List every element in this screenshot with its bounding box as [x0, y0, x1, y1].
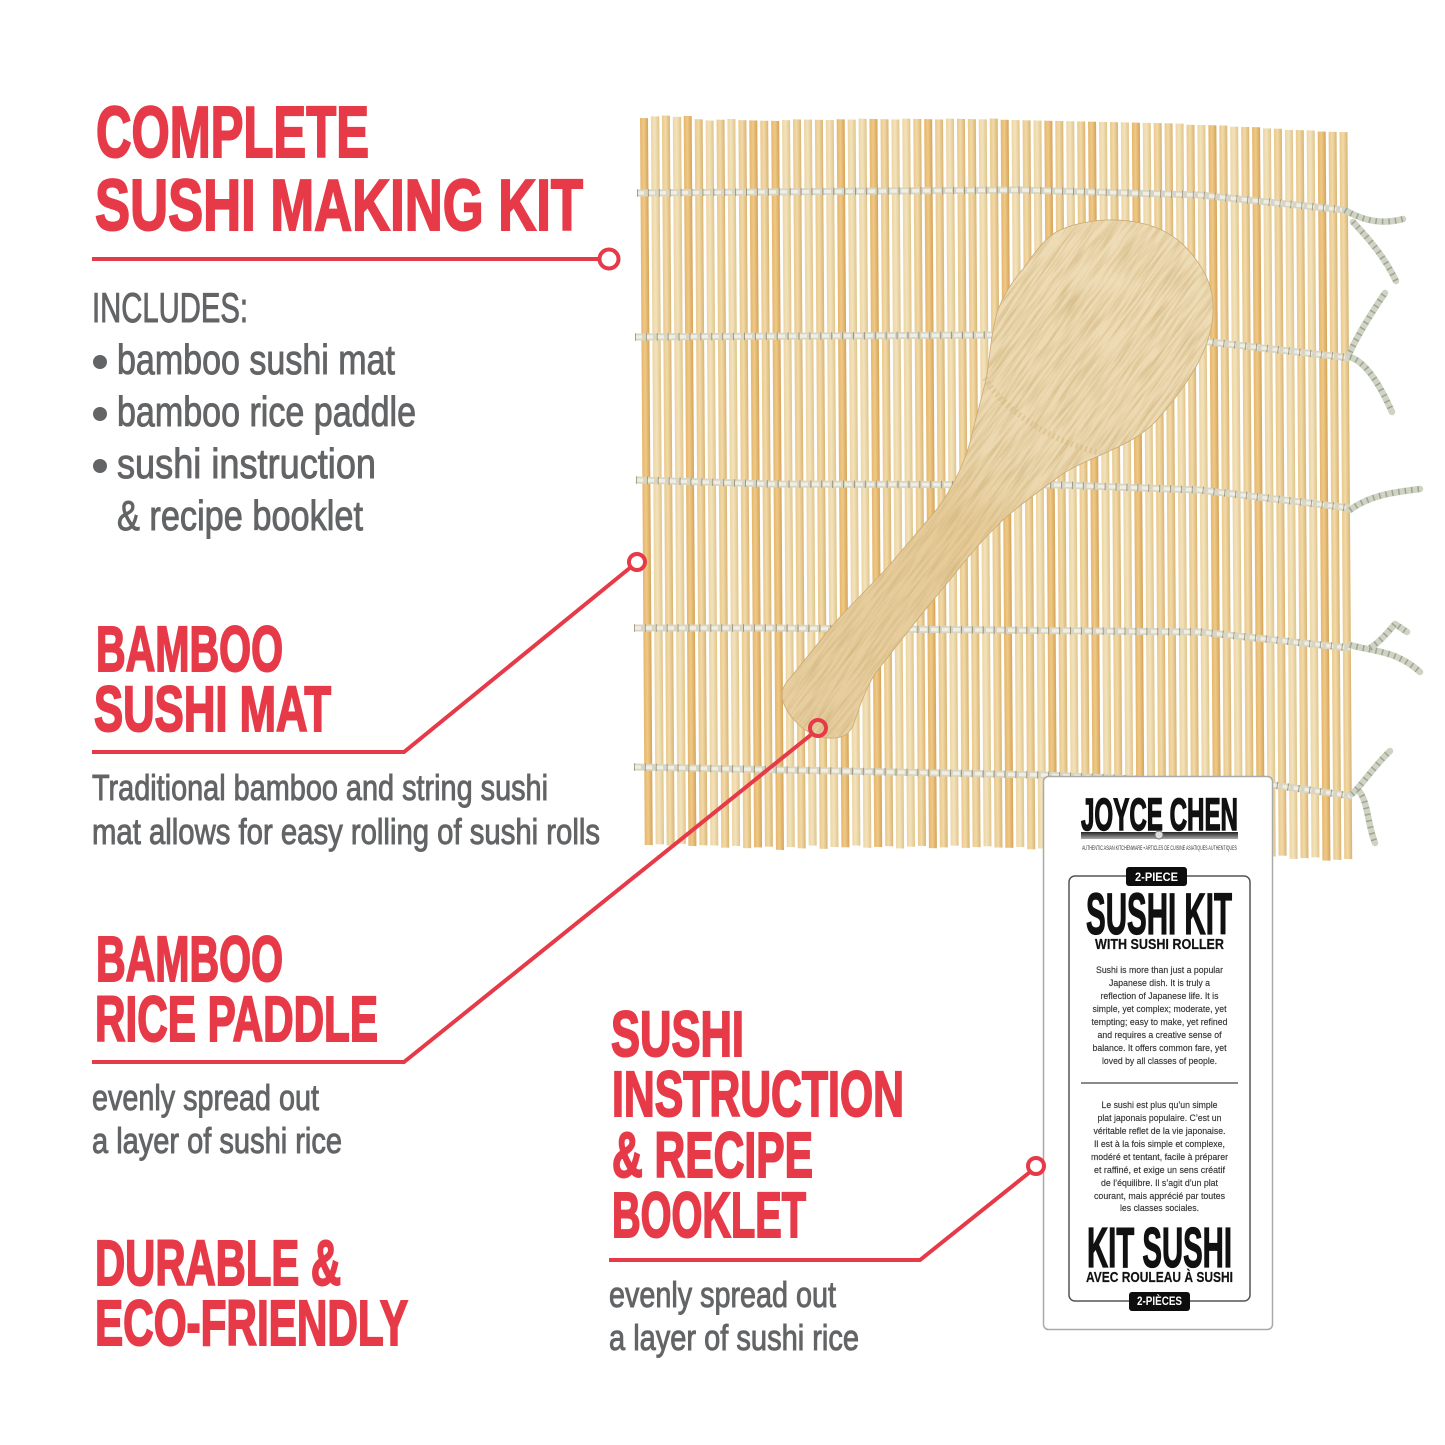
bamboo rice paddle photo	[782, 220, 1214, 739]
booklet title: french: KIT SUSHI	[1087, 1216, 1232, 1280]
booklet title: english: WITH SUSHI ROLLER	[1095, 937, 1224, 953]
booklet paragraph: english: loved by all classes of people.	[1102, 1056, 1217, 1067]
heading: sushi instruction and recipe booklet: SUSHI	[611, 998, 744, 1070]
heading: durable and eco-friendly: DURABLE &	[95, 1227, 341, 1299]
brand logo: JOYCE CHEN	[1081, 789, 1238, 840]
heading: bamboo sushi mat: BAMBOO	[96, 613, 283, 685]
bamboo sushi mat photo	[634, 111, 1420, 862]
heading: bamboo rice paddle	[95, 923, 378, 1055]
booklet paragraph: english: simple, yet complex; moderate, yet	[1092, 1004, 1227, 1015]
booklet title: french: AVEC ROULEAU À SUSHI	[1086, 1269, 1233, 1286]
leader dot: booklet	[1028, 1158, 1044, 1174]
includes list: & recipe booklet	[117, 492, 363, 539]
text: sushi mat description	[92, 767, 600, 852]
binding strings	[634, 190, 1352, 796]
booklet paragraph: french	[1091, 1100, 1228, 1214]
heading: sushi instruction and recipe booklet: & RECIPE	[612, 1119, 813, 1191]
booklet paragraph: english: Japanese dish. It is truly a	[1109, 978, 1211, 989]
text: booklet description	[609, 1274, 859, 1358]
booklet paragraph: english: and requires a creative sense of	[1098, 1030, 1222, 1041]
booklet paragraph: english: balance. It offers common fare, yet	[1092, 1043, 1227, 1054]
brand logo: AUTHENTIC ASIAN KITCHENWARE • ARTICLES DE CUISINE ASIATIQUES AUTHENTIQUES	[1082, 846, 1237, 852]
heading: sushi instruction and recipe booklet: BOOKLET	[612, 1179, 806, 1251]
booklet paragraph: french: les classes sociales.	[1120, 1203, 1199, 1214]
booklet paragraph: french: et raffiné, et exige un sens créatif	[1094, 1165, 1225, 1176]
includes list: bamboo rice paddle	[117, 388, 416, 435]
loose rope ends	[1345, 210, 1420, 843]
text: rice paddle description	[92, 1077, 342, 1161]
booklet paragraph: french: plat japonais populaire. C’est un	[1098, 1113, 1222, 1124]
booklet paragraph: english	[1092, 965, 1228, 1067]
leader line: kit heading	[92, 250, 618, 268]
leader line: rice paddle	[92, 720, 826, 1062]
heading: bamboo sushi mat: SUSHI MAT	[94, 673, 331, 745]
includes list: sushi instruction	[117, 440, 376, 487]
text: rice paddle description: evenly spread out	[92, 1077, 319, 1118]
booklet paragraph: french: de l’équilibre. Il s’agit d’un plat	[1101, 1178, 1218, 1189]
leader line: booklet	[609, 1172, 1030, 1260]
heading: sushi instruction and recipe booklet: INSTRUCTION	[612, 1058, 904, 1130]
booklet title: french	[1086, 1216, 1233, 1286]
heading: durable and eco-friendly: ECO-FRIENDLY	[95, 1287, 408, 1359]
text: rice paddle description: a layer of sushi rice	[92, 1120, 342, 1161]
booklet title: english: SUSHI KIT	[1086, 882, 1232, 947]
includes list: INCLUDES:	[92, 284, 248, 331]
bamboo rods	[640, 111, 1352, 862]
booklet paragraph: french: modéré et tentant, facile à préparer	[1091, 1152, 1228, 1163]
text: sushi mat description: Traditional bamboo and string sushi	[92, 767, 548, 808]
heading: complete sushi making kit: SUSHI MAKING KIT	[95, 166, 583, 246]
heading: bamboo sushi mat	[94, 613, 331, 745]
brand logo	[1081, 789, 1238, 852]
heading: complete sushi making kit: COMPLETE	[96, 93, 369, 173]
badge: 2-pieces: 2-PIÈCES	[1137, 1295, 1182, 1308]
booklet inner frame	[1069, 876, 1250, 1301]
text: sushi mat description: mat allows for easy rolling of sushi rolls	[92, 811, 600, 852]
booklet paragraph: english: reflection of Japanese life. It is	[1100, 991, 1219, 1002]
heading: sushi instruction and recipe booklet	[611, 998, 904, 1251]
includes list	[92, 284, 416, 539]
booklet title: english	[1086, 882, 1232, 953]
booklet paragraph: english: tempting; easy to make, yet refined	[1092, 1017, 1228, 1028]
badge: 2-piece	[1126, 867, 1187, 886]
badge: 2-pieces	[1129, 1292, 1190, 1311]
heading: complete sushi making kit	[95, 93, 583, 246]
text: booklet description: evenly spread out	[609, 1274, 836, 1315]
heading: bamboo rice paddle: RICE PADDLE	[95, 983, 378, 1055]
heading: durable and eco-friendly	[95, 1227, 408, 1359]
booklet paragraph: french: Le sushi est plus qu’un simple	[1102, 1100, 1218, 1111]
booklet paragraph: french: Il est à la fois simple et complexe,	[1094, 1139, 1225, 1150]
booklet paragraph: english: Sushi is more than just a popular	[1096, 965, 1223, 976]
heading: bamboo rice paddle: BAMBOO	[96, 923, 283, 995]
booklet paragraph: french: véritable reflet de la vie japonaise.	[1094, 1126, 1226, 1137]
leader line: sushi mat	[92, 554, 645, 752]
text: booklet description: a layer of sushi rice	[609, 1317, 859, 1358]
booklet paragraph: french: courant, mais apprécié par toutes	[1094, 1191, 1225, 1202]
booklet card	[1044, 776, 1272, 1330]
badge: 2-piece: 2-PIECE	[1135, 872, 1178, 884]
includes list: bamboo sushi mat	[117, 336, 395, 383]
